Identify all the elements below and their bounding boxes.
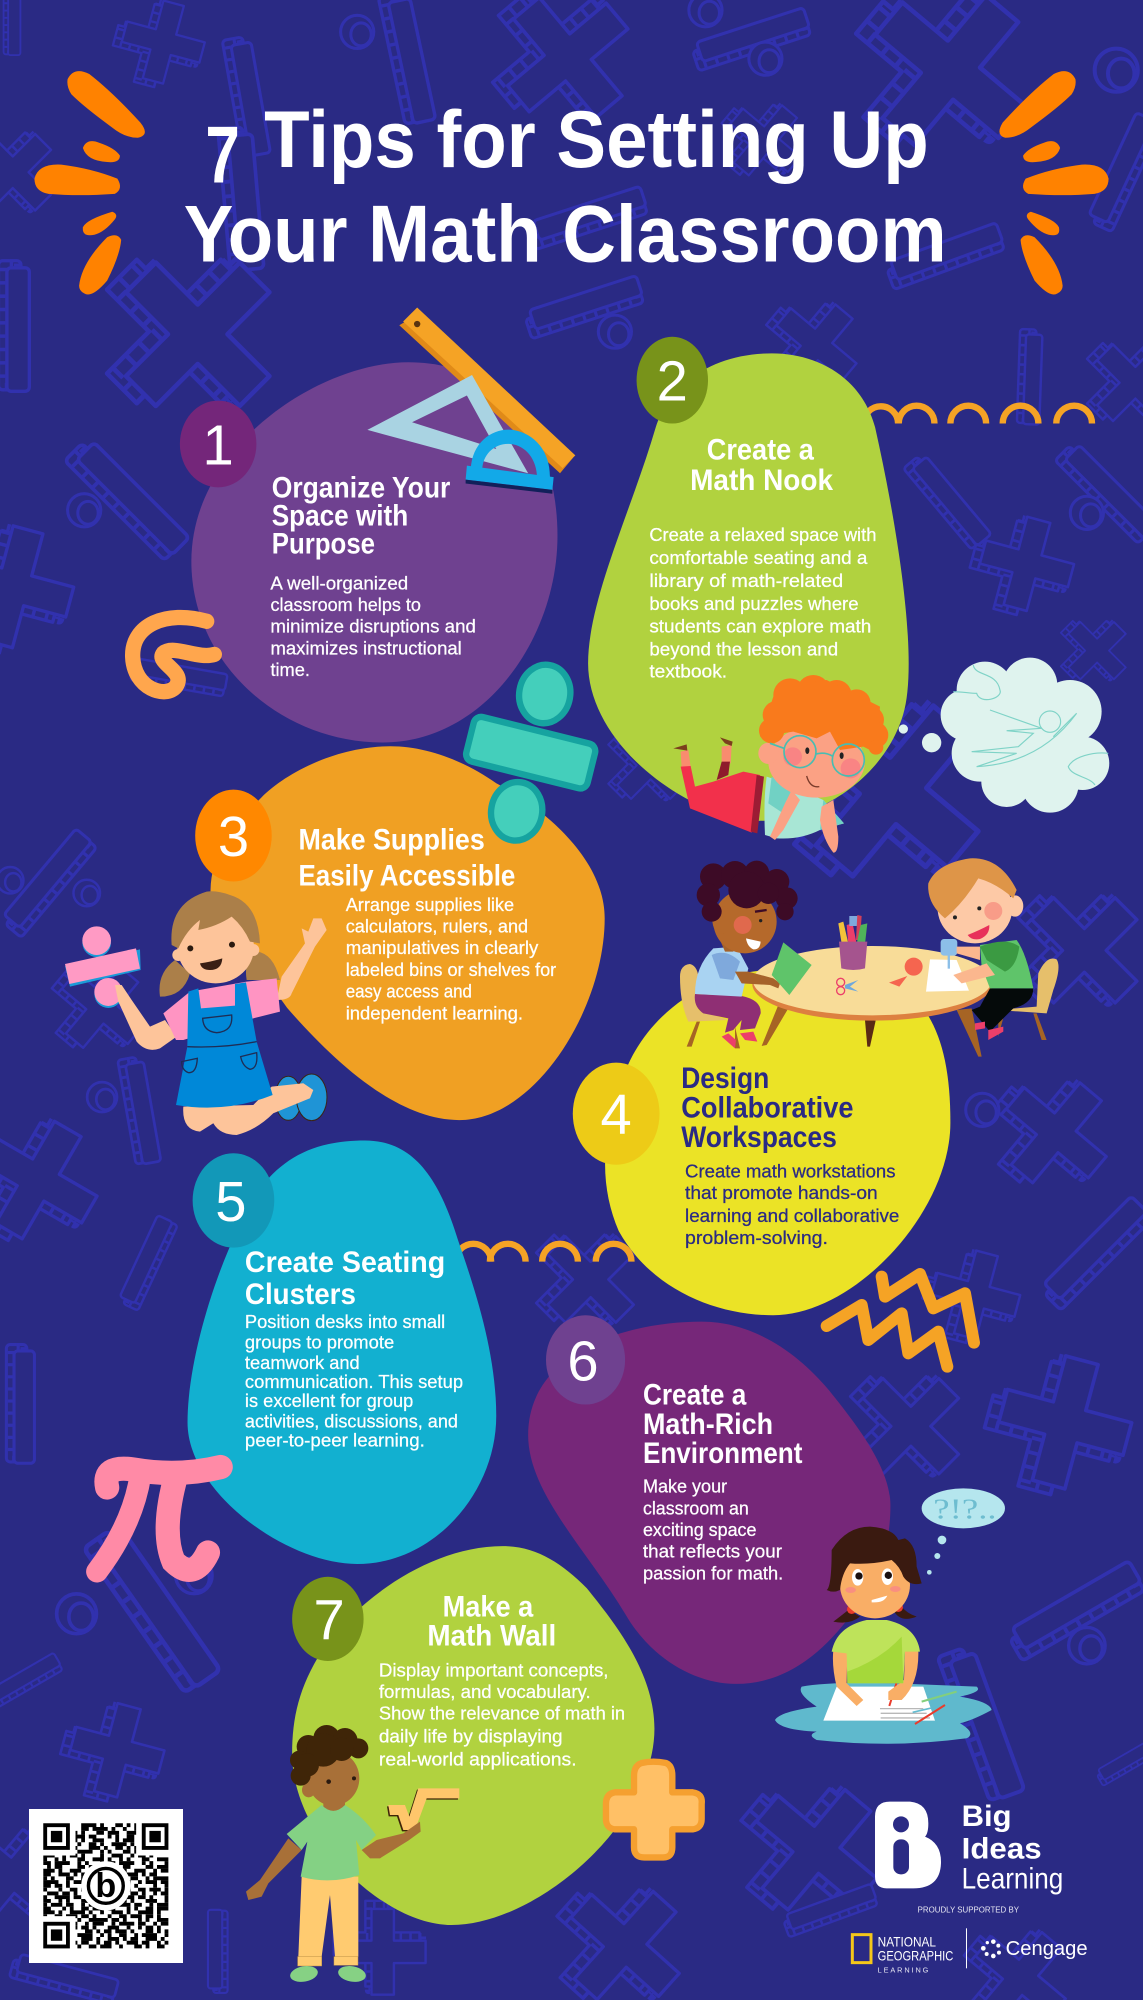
badge 3 <box>195 790 272 882</box>
QR code: b <box>95 1867 116 1905</box>
body text: tip 4: learning and collaborative <box>685 1205 899 1226</box>
badge 3: 3 <box>218 805 249 868</box>
icon: ruler, set square and protractor <box>367 307 575 494</box>
heading: tip 5: Clusters <box>245 1278 356 1311</box>
body text: tip 2: beyond the lesson and <box>649 639 838 660</box>
body text: tip 2: comfortable seating and a <box>649 547 868 568</box>
illustration: boy holding square root <box>246 1725 459 1984</box>
panel: tip 5 blob <box>188 1140 496 1564</box>
panel: tip 3 blob <box>210 746 605 1120</box>
body text: tip 7: Show the relevance of math in <box>379 1703 625 1724</box>
body text: tip 2: textbook. <box>649 660 727 681</box>
badge 7: 7 <box>314 1588 345 1651</box>
body text: tip 5: communication. This setup <box>245 1371 463 1392</box>
badge 7 <box>292 1577 364 1661</box>
body text: tip 3: Arrange supplies like <box>346 894 514 915</box>
body text: tip 7: daily life by displaying <box>379 1726 563 1747</box>
illustration: girl drawing at mat: ?!?.. <box>933 1493 997 1525</box>
body text: tip 1: minimize disruptions and <box>270 616 476 637</box>
badge 5 <box>193 1153 274 1248</box>
body text: tip 3: calculators, rulers, and <box>346 916 528 937</box>
supporter logos: Cengage <box>1006 1937 1088 1960</box>
body text: tip 7: Display important concepts, <box>379 1659 609 1680</box>
heading: tip 4 <box>681 1062 853 1154</box>
body text: tip 3 <box>346 894 556 1023</box>
Big Ideas Learning logo: Big <box>962 1800 1012 1833</box>
panel: tip 4 blob <box>605 970 950 1315</box>
title <box>184 95 947 280</box>
icon: left orange burst <box>34 71 145 295</box>
heading: tip 1 <box>272 472 450 561</box>
body text: tip 3: labeled bins or shelves for <box>346 959 556 980</box>
body text: tip 6: that reflects your <box>643 1541 782 1562</box>
heading: tip 6: Environment <box>643 1437 803 1470</box>
heading: tip 3 <box>299 824 515 892</box>
heading: tip 6: Create a <box>643 1379 747 1412</box>
heading: tip 2: Create a <box>707 433 815 466</box>
body text: tip 1: A well-organized <box>270 572 408 593</box>
supporter logos: GEOGRAPHIC <box>878 1948 953 1964</box>
body text: tip 7 <box>379 1659 625 1770</box>
body text: tip 3: easy access and <box>346 981 472 1002</box>
body text: tip 4: problem-solving. <box>685 1227 828 1248</box>
supporter logos: PROUDLY SUPPORTED BY <box>918 1905 1019 1915</box>
icon: right orange burst <box>999 71 1109 295</box>
body text: tip 5: is excellent for group <box>245 1390 413 1411</box>
heading: tip 6 <box>643 1379 803 1470</box>
badge 2 <box>637 337 708 424</box>
QR code <box>29 1809 183 1963</box>
illustration: girl holding division sign <box>65 891 327 1135</box>
heading: tip 4: Workspaces <box>681 1121 837 1154</box>
body text: tip 6: passion for math. <box>643 1562 783 1583</box>
badge 6: 6 <box>567 1329 599 1392</box>
Big Ideas Learning logo: Learning <box>962 1862 1063 1895</box>
badge 6 <box>546 1315 625 1405</box>
badge 5: 5 <box>215 1170 247 1233</box>
body text: tip 2: books and puzzles where <box>649 593 859 614</box>
body text: tip 6: exciting space <box>643 1519 756 1540</box>
badge 4: 4 <box>601 1083 632 1146</box>
body text: tip 7: formulas, and vocabulary. <box>379 1681 591 1702</box>
heading: tip 7: Make a <box>443 1590 534 1623</box>
title: Tips for Setting Up <box>264 95 929 185</box>
badge 2: 2 <box>657 350 688 413</box>
heading: tip 3: Make Supplies <box>299 824 485 857</box>
illustration: boy with thought cloud <box>673 658 1109 853</box>
heading: tip 4: Collaborative <box>681 1092 853 1125</box>
heading: tip 7 <box>427 1590 556 1653</box>
body text: tip 6 <box>643 1476 783 1583</box>
body text: tip 7: real-world applications. <box>379 1749 577 1770</box>
Big Ideas Learning logo <box>875 1800 1063 1895</box>
title: 7 <box>205 110 240 200</box>
panel: tip 1 blob <box>191 362 557 742</box>
body text: tip 1: time. <box>270 659 310 680</box>
decorative arcs row 2 <box>455 1244 684 1262</box>
heading: tip 2: Math Nook <box>690 464 834 497</box>
body text: tip 2: Create a relaxed space with <box>649 524 876 545</box>
title: Your Math Classroom <box>184 190 947 280</box>
body text: tip 5: Position desks into small <box>245 1311 445 1332</box>
heading: tip 2 <box>690 433 834 497</box>
badge 4 <box>573 1063 660 1165</box>
heading: tip 5 <box>245 1246 445 1311</box>
body text: tip 1: classroom helps to <box>270 594 421 615</box>
body text: tip 3: manipulatives in clearly <box>346 937 539 958</box>
panel: tip 6 blob <box>528 1322 890 1684</box>
icon: pi symbol <box>97 1467 221 1572</box>
body text: tip 2: library of math-related <box>649 570 843 591</box>
body text: tip 1 <box>270 572 476 680</box>
body text: tip 4: that promote hands-on <box>685 1182 878 1203</box>
heading: tip 1: Purpose <box>272 528 375 561</box>
badge 1 <box>180 401 256 487</box>
body text: tip 5: peer-to-peer learning. <box>245 1430 425 1451</box>
supporter logos: LEARNING <box>878 1966 929 1975</box>
panel: tip 7 blob <box>292 1546 654 1925</box>
supporter logos <box>852 1905 1088 1975</box>
heading: tip 5: Create Seating <box>245 1246 445 1279</box>
icon: orange plus <box>606 1762 702 1857</box>
body text: tip 3: independent learning. <box>346 1002 523 1023</box>
body text: tip 5 <box>245 1311 463 1451</box>
body text: tip 5: teamwork and <box>245 1352 360 1373</box>
body text: tip 6: classroom an <box>643 1497 749 1518</box>
body text: tip 4: Create math workstations <box>685 1160 896 1181</box>
illustration: girl drawing at mat <box>775 1488 1005 1744</box>
body text: tip 6: Make your <box>643 1476 727 1497</box>
panel: tip 2 blob <box>588 353 909 821</box>
heading: tip 1: Organize Your <box>272 472 450 505</box>
illustration: two kids at a table <box>680 858 1059 1057</box>
supporter logos: NATIONAL <box>878 1934 936 1950</box>
Big Ideas Learning logo: Ideas <box>962 1832 1042 1865</box>
heading: tip 6: Math-Rich <box>643 1408 773 1441</box>
heading: tip 3: Easily Accessible <box>299 859 515 892</box>
body text: tip 1: maximizes instructional <box>270 637 462 658</box>
body text: tip 2 <box>649 524 876 681</box>
icon: teal division sign <box>464 661 597 845</box>
body text: tip 5: groups to promote <box>245 1331 394 1352</box>
badge 1: 1 <box>203 413 234 476</box>
decorative arcs row 1 <box>864 406 1092 424</box>
heading: tip 7: Math Wall <box>427 1620 556 1653</box>
icon: orange squiggle <box>133 617 214 692</box>
body text: tip 5: activities, discussions, and <box>245 1411 458 1432</box>
heading: tip 1: Space with <box>272 500 408 533</box>
body text: tip 4 <box>685 1160 899 1248</box>
zigzag decoration <box>827 1274 974 1367</box>
heading: tip 4: Design <box>681 1062 769 1095</box>
body text: tip 2: students can explore math <box>649 616 871 637</box>
